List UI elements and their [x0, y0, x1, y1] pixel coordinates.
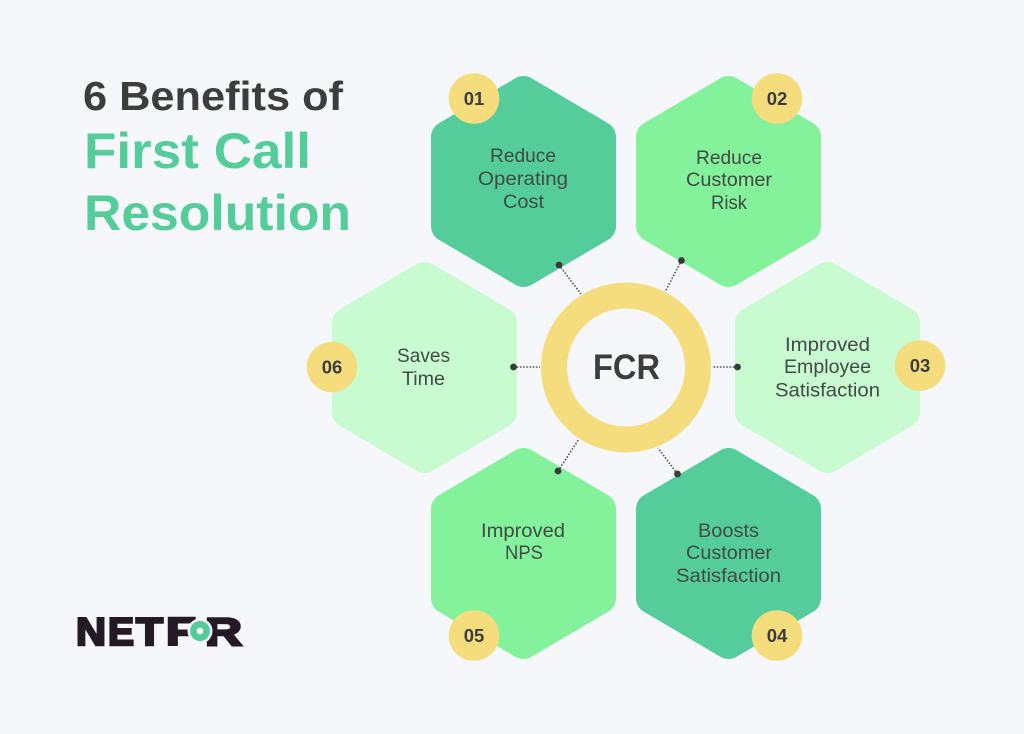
logo: NETFOR	[76, 611, 242, 654]
panel: benefit 03 Improved Employee Satisfaction	[751, 278, 945, 457]
panel: benefit 01 Reduce Operating Cost: Cost	[503, 191, 545, 213]
title: 6 Benefits of	[83, 73, 343, 119]
panel: benefit 01 Reduce Operating Cost: Reduce	[490, 145, 556, 167]
panel: benefit 02 Reduce Customer Risk: Risk	[711, 192, 747, 214]
badge 03	[895, 340, 945, 391]
badge 05	[449, 610, 499, 661]
badge 05: 05	[464, 625, 484, 646]
badge 06	[307, 342, 357, 392]
panel: benefit 05 Improved NPS	[447, 464, 600, 661]
panel: benefit 05 Improved NPS: Improved	[481, 520, 565, 542]
logo: NETFOR: F	[166, 611, 196, 654]
panel: benefit 04 Boosts Customer Satisfaction: Satisfaction	[676, 565, 781, 587]
panel: benefit 03 Improved Employee Satisfaction: Employee	[784, 356, 871, 378]
panel: benefit 01 Reduce Operating Cost: Operating	[478, 168, 568, 190]
connectors from hexagons to hub	[510, 257, 741, 477]
badge 01	[449, 73, 499, 124]
panel: benefit 03 Improved Employee Satisfaction: Satisfaction	[775, 380, 880, 402]
badge 02: 02	[767, 88, 787, 109]
panel: benefit 04 Boosts Customer Satisfaction: Customer	[686, 542, 773, 564]
badge 03: 03	[910, 355, 930, 376]
hub: FCR ring	[554, 296, 698, 440]
title: Resolution	[84, 185, 351, 241]
panel: benefit 06 Saves Time: Saves	[397, 345, 450, 367]
panel: benefit 02 Reduce Customer Risk: Customer	[686, 169, 773, 191]
panel: benefit 02 Reduce Customer Risk: Reduce	[696, 147, 762, 169]
panel: benefit 06 Saves Time: Time	[402, 368, 445, 390]
badge 04: 04	[767, 625, 788, 646]
badge 01: 01	[464, 88, 484, 109]
panel: benefit 06 Saves Time	[307, 278, 501, 457]
panel: benefit 01 Reduce Operating Cost	[447, 73, 600, 271]
title	[83, 73, 351, 241]
panel: benefit 02 Reduce Customer Risk	[652, 73, 805, 271]
hub: FCR ring: FCR	[593, 348, 660, 387]
panel: benefit 04 Boosts Customer Satisfaction	[652, 464, 805, 661]
badge 02	[752, 73, 802, 124]
logo: NETFOR: R	[205, 611, 242, 654]
panel: benefit 03 Improved Employee Satisfaction: Improved	[785, 334, 870, 356]
title: First Call	[84, 123, 311, 179]
badge 06: 06	[322, 356, 342, 378]
logo: NETFOR: N	[76, 611, 106, 654]
logo: NETFOR: E	[108, 611, 134, 654]
panel: benefit 05 Improved NPS: NPS	[505, 542, 543, 564]
logo: NETFOR: T	[136, 611, 163, 654]
badge 04	[752, 610, 802, 661]
panel: benefit 04 Boosts Customer Satisfaction: Boosts	[698, 520, 759, 542]
